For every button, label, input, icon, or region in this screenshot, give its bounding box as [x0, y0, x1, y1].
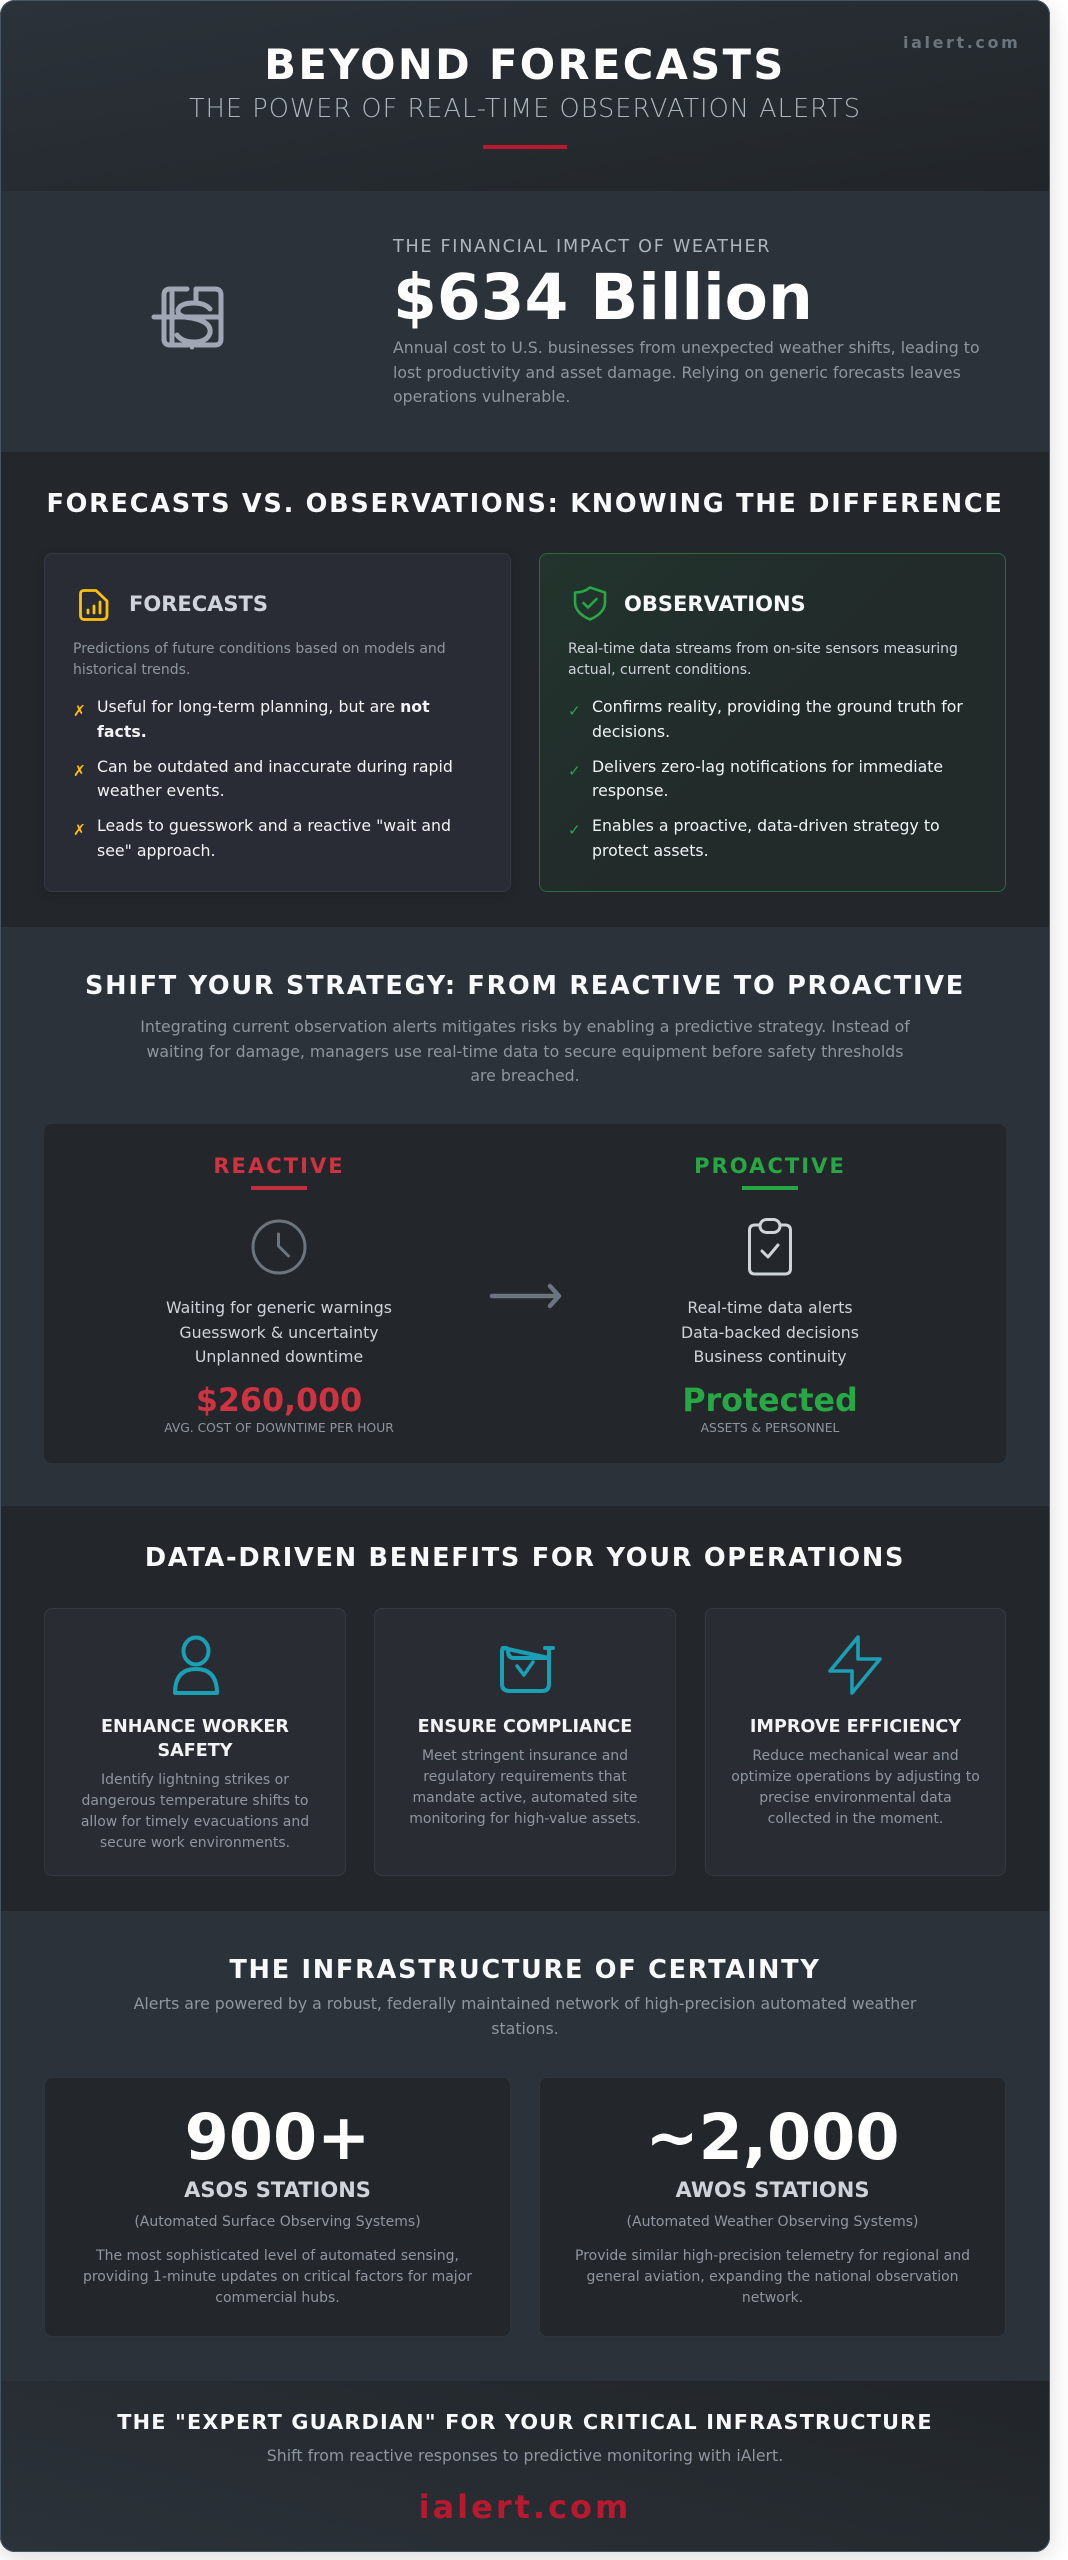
ASOS title: ASOS STATIONS — [184, 2178, 371, 2202]
panel: financial impact — [0, 191, 1050, 452]
ASOS description: The most sophisticated level of automated sensing, — [96, 2248, 459, 2264]
icon: lightning bolt — [828, 1635, 882, 1695]
proactive list: Business continuity — [693, 1347, 847, 1366]
proactive underline — [742, 1186, 798, 1190]
card title: SAFETY — [157, 1741, 233, 1761]
bullet text — [592, 816, 940, 860]
proactive column — [681, 1154, 859, 1435]
card text: Meet stringent insurance and — [422, 1748, 628, 1764]
bullet 1 — [73, 697, 430, 741]
strategy description: waiting for damage, managers use real-time data to secure equipment before safety thresholds — [146, 1042, 904, 1061]
bullet 2 — [73, 756, 453, 800]
heading: DATA-DRIVEN BENEFITS FOR YOUR OPERATIONS — [145, 1542, 905, 1572]
bullet text: protect assets. — [592, 841, 709, 860]
check mark: ✓ — [568, 762, 581, 780]
card title: FORECASTS — [129, 592, 268, 616]
bullet text — [592, 697, 963, 741]
card text: mandate active, automated site — [412, 1790, 638, 1806]
bullet text — [592, 756, 943, 800]
panel: footer — [0, 2381, 1050, 2552]
panel: shift your strategy — [0, 927, 1050, 1506]
check mark: ✓ — [568, 821, 581, 839]
financial description: operations vulnerable. — [393, 387, 570, 406]
cross mark: ✗ — [73, 702, 86, 720]
red accent line — [483, 145, 567, 149]
card title: ENHANCE WORKER — [101, 1716, 289, 1736]
proactive stat caption: ASSETS & PERSONNEL — [701, 1421, 839, 1435]
icon: clipboard check — [748, 1218, 792, 1276]
cross mark: ✗ — [73, 821, 86, 839]
ASOS description: providing 1-minute updates on critical factors for major — [83, 2268, 472, 2284]
card title: ENSURE COMPLIANCE — [418, 1716, 632, 1736]
bullet text: Useful for long-term planning, but are not — [97, 697, 430, 716]
panel: header — [0, 0, 1050, 191]
card: observations — [539, 553, 1006, 892]
bullet text: response. — [592, 781, 669, 800]
strategy description: are breached. — [470, 1066, 580, 1085]
reactive stat: $260,000 — [196, 1383, 362, 1419]
bullet text: Confirms reality, providing the ground truth for — [592, 697, 963, 716]
card: AWOS — [539, 2076, 1006, 2336]
arrow — [490, 1284, 562, 1308]
strategy description: Integrating current observation alerts mitigates risks by enabling a predictive strategy. Instead of — [140, 1017, 910, 1036]
card description — [568, 641, 958, 678]
ASOS subtitle: (Automated Surface Observing Systems) — [134, 2214, 421, 2230]
card description: Real-time data streams from on-site sensors measuring — [568, 641, 958, 657]
bullet text: facts. — [97, 722, 147, 741]
AWOS description: general aviation, expanding the national observation — [586, 2268, 959, 2284]
card: forecasts — [44, 553, 511, 892]
card text: collected in the moment. — [768, 1811, 943, 1827]
bullet text: Can be outdated and inaccurate during rapid — [97, 756, 453, 776]
AWOS title: AWOS STATIONS — [676, 2178, 869, 2202]
icon: document chart — [79, 589, 108, 621]
cross mark: ✗ — [73, 762, 86, 780]
bullet text — [97, 697, 430, 741]
heading: FORECASTS VS. OBSERVATIONS: KNOWING THE DIFFERENCE — [46, 488, 1004, 518]
infrastructure description: stations. — [491, 2019, 559, 2038]
subtitle: THE POWER OF REAL-TIME OBSERVATION ALERTS — [189, 94, 861, 124]
bullet text: see" approach. — [97, 841, 216, 860]
proactive stat: Protected — [682, 1383, 858, 1419]
footer brand: ialert.com — [419, 2488, 631, 2526]
bullet 2 — [568, 756, 943, 800]
card text: regulatory requirements that — [423, 1769, 627, 1785]
reactive column — [164, 1154, 394, 1435]
reactive stat caption: AVG. COST OF DOWNTIME PER HOUR — [164, 1421, 394, 1435]
infrastructure description — [134, 1994, 916, 2038]
bullet text: decisions. — [592, 722, 670, 741]
reactive list — [166, 1298, 392, 1366]
AWOS number: ~2,000 — [645, 2100, 900, 2174]
AWOS description — [575, 2248, 970, 2306]
card text: Reduce mechanical wear and — [752, 1748, 959, 1764]
infrastructure description: Alerts are powered by a robust, federally maintained network of high-precision automated weather — [134, 1994, 916, 2013]
bullet text: Delivers zero-lag notifications for immediate — [592, 756, 943, 776]
proactive list — [681, 1298, 859, 1366]
card title: IMPROVE EFFICIENCY — [750, 1716, 961, 1736]
big number: $634 Billion — [393, 261, 813, 334]
AWOS description: Provide similar high-precision telemetry for regional and — [575, 2248, 970, 2264]
AWOS subtitle: (Automated Weather Observing Systems) — [627, 2214, 918, 2230]
ASOS number: 900+ — [185, 2100, 370, 2174]
card: compliance — [374, 1608, 676, 1876]
bullet 3 — [568, 816, 940, 860]
card text: secure work environments. — [100, 1835, 290, 1851]
proactive list: Data-backed decisions — [681, 1323, 859, 1342]
card description: Predictions of future conditions based on models and — [73, 641, 446, 657]
reactive list: Waiting for generic warnings — [166, 1298, 392, 1317]
bullet 3 — [73, 816, 451, 860]
reactive heading: REACTIVE — [213, 1154, 345, 1178]
card description: historical trends. — [73, 662, 190, 678]
comparison panel — [44, 1124, 1006, 1463]
card text — [81, 1772, 309, 1851]
footer text: Shift from reactive responses to predictive monitoring with iAlert. — [267, 2446, 783, 2465]
card text: dangerous temperature shifts to — [82, 1793, 308, 1809]
brand label: ialert.com — [903, 33, 1020, 52]
footer heading: THE "EXPERT GUARDIAN" FOR YOUR CRITICAL INFRASTRUCTURE — [117, 2410, 933, 2434]
card: ASOS — [44, 2076, 511, 2336]
card text — [731, 1748, 980, 1827]
card title — [101, 1716, 289, 1761]
financial label: THE FINANCIAL IMPACT OF WEATHER — [393, 237, 771, 257]
reactive underline — [251, 1186, 307, 1190]
card text: allow for timely evacuations and — [81, 1814, 309, 1830]
icon: shield check — [574, 586, 606, 621]
card text: Identify lightning strikes or — [101, 1772, 289, 1788]
bullet text — [97, 756, 453, 800]
icon: clock — [252, 1220, 306, 1274]
reactive list: Guesswork & uncertainty — [179, 1323, 379, 1342]
check mark: ✓ — [568, 702, 581, 720]
panel: forecasts vs observations — [0, 452, 1050, 927]
card text — [409, 1748, 641, 1827]
ASOS description — [83, 2248, 472, 2306]
reactive list: Unplanned downtime — [195, 1347, 363, 1366]
card description — [73, 641, 446, 678]
panel: infrastructure — [0, 1911, 1050, 2381]
card title: OBSERVATIONS — [624, 592, 806, 616]
card text: optimize operations by adjusting to — [731, 1769, 980, 1785]
AWOS description: network. — [742, 2290, 803, 2306]
card text: monitoring for high-value assets. — [409, 1811, 641, 1827]
ASOS description: commercial hubs. — [215, 2290, 340, 2306]
strategy description — [140, 1017, 910, 1085]
financial description: Annual cost to U.S. businesses from unexpected weather shifts, leading to — [393, 338, 980, 357]
bullet text: Enables a proactive, data-driven strategy to — [592, 816, 940, 835]
bullet 1 — [568, 697, 963, 741]
heading: THE INFRASTRUCTURE OF CERTAINTY — [229, 1955, 821, 1985]
icon: person — [173, 1636, 219, 1695]
proactive heading: PROACTIVE — [694, 1154, 846, 1178]
heading: SHIFT YOUR STRATEGY: FROM REACTIVE TO PROACTIVE — [85, 971, 965, 1001]
icon: dollar bill — [152, 286, 224, 350]
card: worker safety — [44, 1608, 346, 1876]
financial description — [393, 338, 980, 406]
card: efficiency — [705, 1608, 1006, 1876]
bullet text — [97, 816, 451, 860]
bullet text: weather events. — [97, 781, 225, 800]
card description: actual, current conditions. — [568, 662, 751, 678]
proactive list: Real-time data alerts — [687, 1298, 853, 1317]
title: BEYOND FORECASTS — [264, 40, 786, 89]
icon: calendar check — [500, 1646, 555, 1693]
panel: benefits — [0, 1506, 1050, 1911]
bullet text: Leads to guesswork and a reactive "wait and — [97, 816, 451, 835]
financial description: lost productivity and asset damage. Relying on generic forecasts leaves — [393, 363, 961, 382]
card text: precise environmental data — [759, 1790, 952, 1806]
